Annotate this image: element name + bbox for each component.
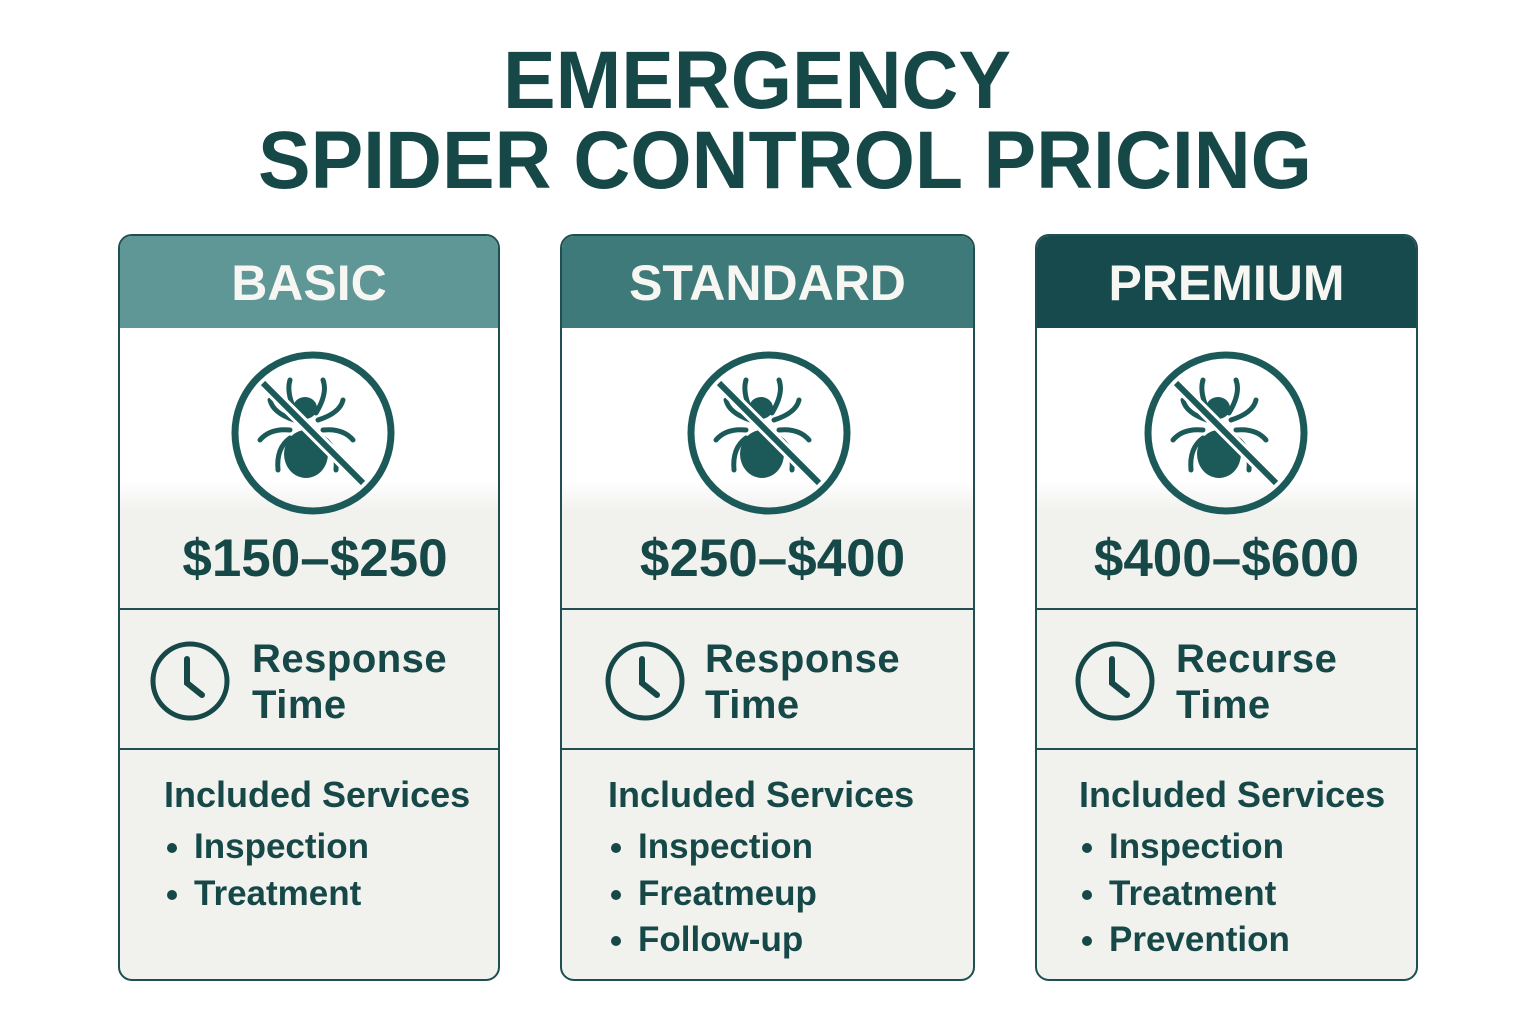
response time	[705, 637, 900, 727]
icon: clock	[1076, 642, 1154, 720]
price: $150–$250	[182, 529, 448, 588]
services: Freatmeup	[638, 874, 817, 912]
icon: no spider	[1144, 352, 1308, 514]
header: premium: PREMIUM	[1108, 255, 1345, 311]
icon: no spider	[688, 352, 850, 514]
header: basic: BASIC	[231, 255, 387, 311]
services: Included Services	[608, 774, 914, 815]
services	[608, 774, 914, 959]
services: Included Services	[164, 774, 470, 815]
header: basic	[120, 236, 498, 328]
icon: no spider	[232, 352, 394, 514]
response time: Response	[705, 637, 900, 681]
services	[164, 774, 470, 912]
price: $250–$400	[640, 529, 905, 588]
panel: basic	[118, 234, 500, 981]
response time	[252, 637, 447, 727]
services: Inspection	[194, 827, 369, 866]
services: Included Services	[1079, 774, 1385, 815]
header: premium	[1037, 236, 1416, 328]
services: Treatment	[194, 874, 361, 912]
services: Inspection	[1109, 827, 1284, 866]
services: Follow-up	[638, 920, 803, 959]
services	[1079, 774, 1385, 959]
response time: Time	[705, 683, 800, 727]
services: Treatment	[1109, 874, 1276, 912]
recurse time: Time	[1176, 683, 1271, 727]
price: $400–$600	[1094, 529, 1359, 588]
recurse time: Recurse	[1176, 637, 1337, 681]
title	[258, 35, 1312, 200]
response time: Response	[252, 637, 447, 681]
panel: premium	[1035, 234, 1418, 981]
recurse time	[1176, 637, 1337, 727]
icon: clock	[150, 642, 230, 720]
panel: standard	[560, 234, 975, 981]
services: Prevention	[1109, 920, 1290, 959]
response time: Time	[252, 683, 347, 727]
header: standard	[562, 236, 973, 328]
services: Inspection	[638, 827, 813, 866]
icon: clock	[606, 642, 684, 720]
header: standard: STANDARD	[629, 255, 906, 311]
title: EMERGENCY	[503, 35, 1011, 126]
